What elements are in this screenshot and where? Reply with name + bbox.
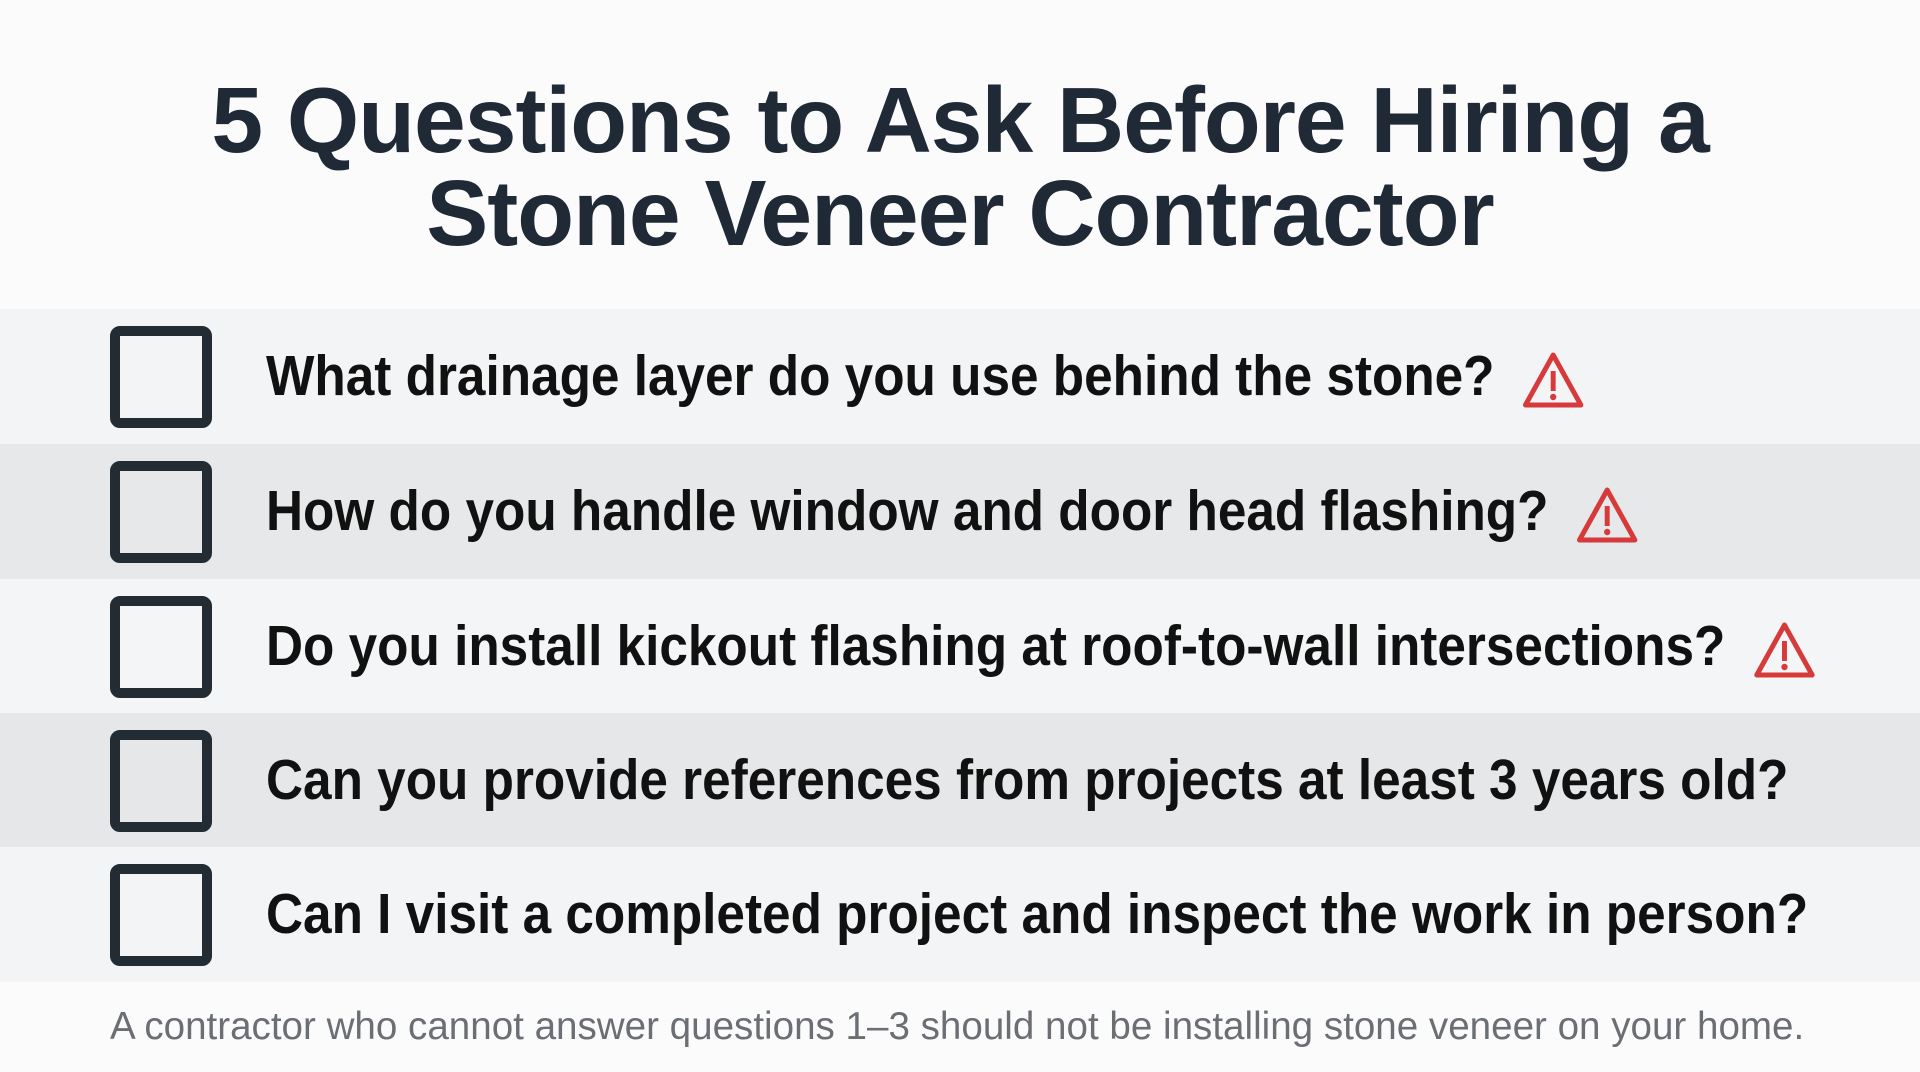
checkbox 3: [110, 596, 212, 698]
question 3: Do you install kickout flashing at roof-to-wall intersections?: [266, 614, 1725, 678]
question 4: Can you provide references from projects at least 3 years old?: [266, 748, 1788, 812]
title: Stone Veneer Contractor: [426, 161, 1494, 265]
question 1: What drainage layer do you use behind the stone?: [266, 344, 1495, 408]
footer note: A contractor who cannot answer questions 1–3 should not be installing stone veneer on your home.: [110, 1005, 1804, 1048]
row 1: [0, 309, 1920, 444]
question 5: Can I visit a completed project and inspect the work in person?: [266, 882, 1808, 946]
title: 5 Questions to Ask Before Hiring a: [211, 68, 1709, 172]
row 4: [0, 713, 1920, 848]
question 2: How do you handle window and door head flashing?: [266, 479, 1548, 543]
checkbox 5: [110, 864, 212, 966]
title: [211, 68, 1710, 265]
checkbox 1: [110, 326, 212, 428]
row 2: [0, 444, 1920, 579]
row 3: [0, 579, 1920, 714]
checkbox 4: [110, 730, 212, 832]
checkbox 2: [110, 461, 212, 563]
row 5: [0, 847, 1920, 982]
